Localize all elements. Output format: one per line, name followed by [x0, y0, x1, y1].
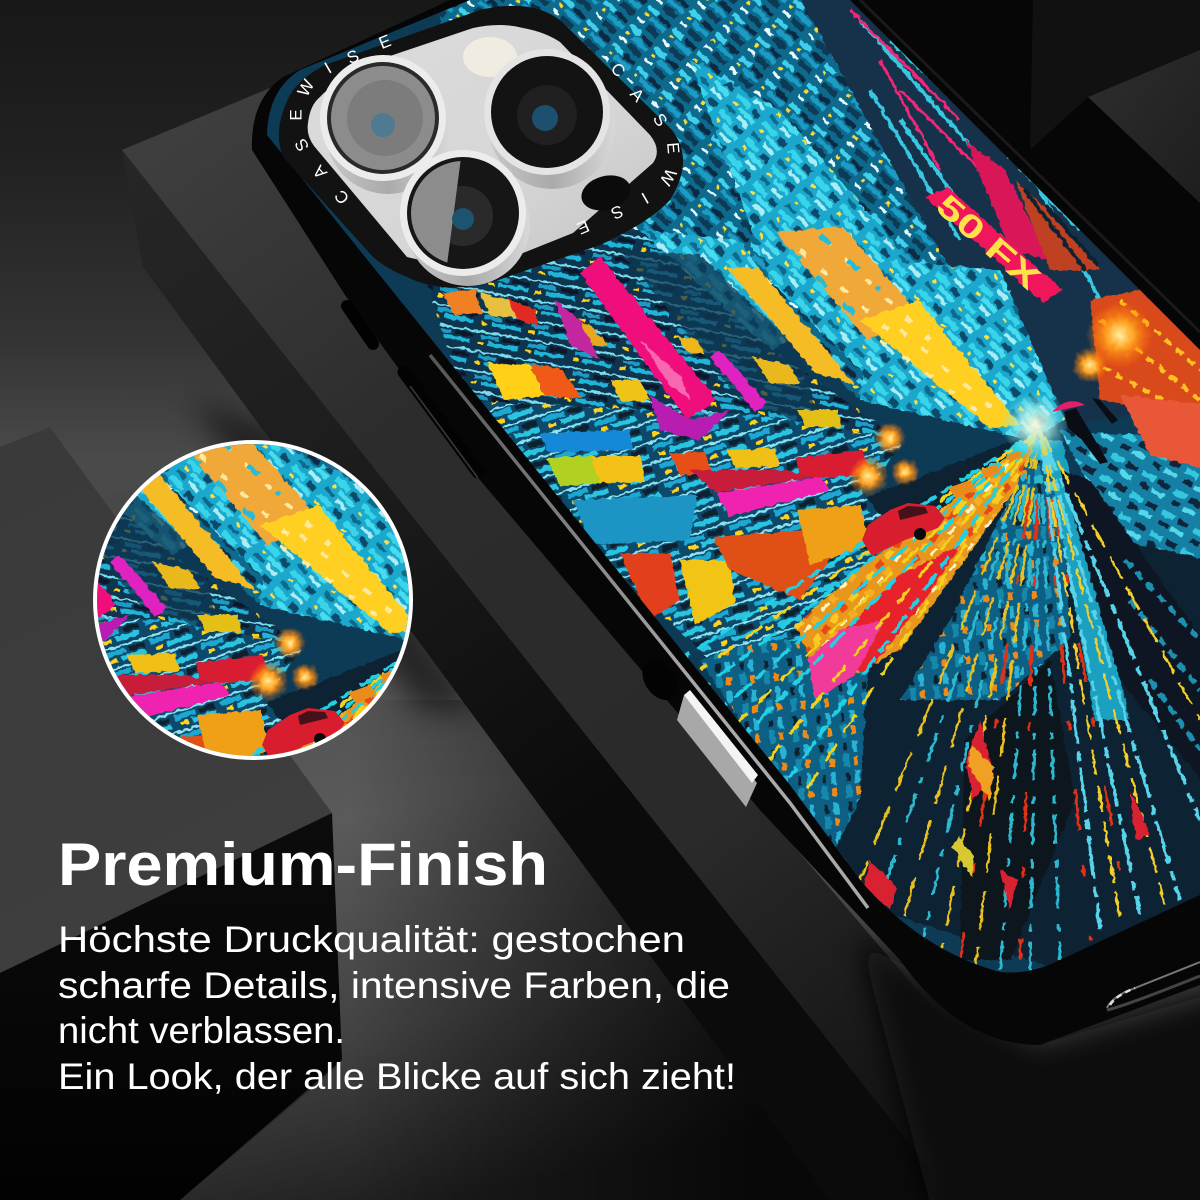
CASEWISE lettering: W	[656, 165, 680, 189]
CASEWISE lettering	[286, 31, 683, 238]
camera island	[279, 6, 683, 287]
CASEWISE lettering: W	[294, 76, 318, 100]
shadow next to central block	[190, 400, 480, 710]
CASEWISE lettering: C	[331, 186, 353, 208]
flash	[463, 37, 517, 77]
top right dark area	[860, 0, 1200, 330]
CASEWISE lettering: A	[309, 161, 331, 183]
CASEWISE lettering: I	[638, 189, 652, 207]
body text: Höchste Druckqualität: gestochen	[58, 919, 685, 960]
black camera ring	[279, 6, 683, 287]
lens 2	[484, 49, 615, 189]
detail magnifier circle	[93, 440, 413, 760]
CASEWISE lettering: E	[286, 109, 306, 121]
top right wall	[1030, 0, 1200, 150]
central block top face	[122, 88, 1060, 1200]
umbrella figure	[1052, 398, 1118, 464]
CASEWISE lettering: S	[291, 135, 313, 155]
lower left block top face	[0, 427, 332, 973]
body text: Ein Look, der alle Blicke auf sich zieht!	[58, 1056, 736, 1097]
lens 1	[320, 55, 450, 194]
silver camera window	[308, 25, 657, 265]
CASEWISE lettering: C	[607, 59, 629, 81]
neon sign text: 50 FX	[929, 187, 1048, 297]
side button silver	[635, 653, 758, 807]
lens 3	[400, 150, 530, 286]
microphone sensor	[577, 170, 635, 216]
CASEWISE lettering: A	[626, 84, 648, 106]
CASEWISE lettering: E	[376, 31, 394, 53]
art on case	[250, 0, 1200, 1000]
CASEWISE lettering: E	[574, 216, 592, 238]
lower light band falloff	[300, 700, 830, 1200]
top right block	[1088, 50, 1200, 203]
phone	[250, 0, 1200, 1045]
central block front face	[122, 150, 955, 1200]
CASEWISE lettering: S	[608, 201, 626, 223]
CASEWISE lettering: I	[321, 59, 335, 77]
upper-right rim	[860, 0, 1200, 332]
phone shadow lower right	[860, 940, 1200, 1200]
charging port	[1107, 962, 1200, 1010]
volume buttons	[347, 306, 478, 478]
CASEWISE lettering: S	[649, 110, 671, 130]
CASEWISE lettering: E	[663, 142, 683, 154]
heading: Premium-Finish	[58, 831, 548, 898]
glossy edge highlight	[430, 355, 868, 908]
phone case body	[252, 0, 1200, 1045]
body text: scharfe Details, intensive Farben, die	[58, 965, 730, 1006]
body text	[58, 919, 736, 1097]
CASEWISE lettering: S	[344, 46, 362, 68]
lower left block front face	[0, 813, 342, 1200]
body text: nicht verblassen.	[58, 1010, 345, 1051]
lower light band	[100, 433, 830, 1200]
